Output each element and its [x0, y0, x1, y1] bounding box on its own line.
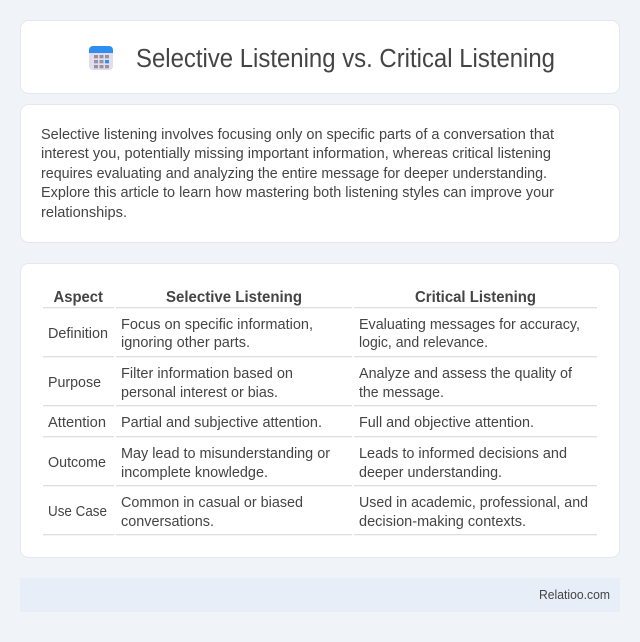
table row: definition: [48, 317, 580, 351]
table row: use case: [48, 495, 588, 530]
footer bar: [20, 578, 620, 612]
table row: outcome: May lead to misunderstanding or: [121, 446, 330, 462]
table row: purpose: Purpose: [48, 375, 101, 391]
panel: comparison table: [20, 264, 620, 558]
text block: introduction paragraph: Selective listening involves focusing only on specific parts of a conversation that: [41, 127, 554, 143]
table row: attention: [48, 415, 534, 431]
text block: introduction paragraph: Explore this article to learn how mastering both listening styles can improve your: [41, 185, 554, 201]
table row: attention: Full and objective attention.: [359, 415, 534, 431]
footer text: Relatioo.com: [539, 588, 610, 602]
table row: outcome: Outcome: [48, 455, 106, 471]
table header row: Aspect: [54, 289, 104, 306]
table header row: Selective Listening: [166, 289, 302, 306]
table row: purpose: the message.: [359, 385, 444, 401]
table row: outcome: [48, 446, 567, 481]
table row: outcome: Leads to informed decisions and: [359, 446, 567, 462]
text block: introduction paragraph: interest you, potentially missing important information, whereas critical listening: [41, 146, 551, 162]
text block: introduction paragraph: requires evaluating and analyzing the entire message for deeper understanding.: [41, 166, 547, 182]
table row: use case: conversations.: [121, 514, 214, 530]
text block: introduction paragraph: relationships.: [41, 205, 127, 221]
table header row: Critical Listening: [415, 289, 536, 306]
table row: definition: ignoring other parts.: [121, 335, 250, 351]
table row: use case: decision-making contexts.: [359, 514, 526, 530]
panel: introduction: [20, 104, 620, 242]
table row: attention: Attention: [48, 415, 106, 431]
table row: definition: Definition: [48, 326, 108, 342]
table row: definition: Focus on specific information,: [121, 317, 313, 333]
panel: title header: [20, 20, 620, 94]
table row: purpose: [48, 366, 573, 401]
table row: attention: Partial and subjective attention.: [121, 415, 322, 431]
table header row: [54, 289, 536, 306]
table row: definition: Evaluating messages for accuracy,: [359, 317, 580, 333]
table row: definition: logic, and relevance.: [359, 335, 488, 351]
table row: use case: Common in casual or biased: [121, 495, 303, 511]
table row: outcome: deeper understanding.: [359, 465, 502, 481]
table row: use case: Use Case: [48, 504, 107, 520]
table row: purpose: Analyze and assess the quality of: [359, 366, 573, 382]
title: Selective Listening vs. Critical Listening: [136, 45, 555, 73]
icon: calendar: [89, 46, 113, 70]
table row: purpose: Filter information based on: [121, 366, 293, 382]
table row: purpose: personal interest or bias.: [121, 385, 278, 401]
text block: introduction paragraph: [41, 127, 554, 221]
table row: outcome: incomplete knowledge.: [121, 465, 268, 481]
table row: use case: Used in academic, professional, and: [359, 495, 588, 511]
